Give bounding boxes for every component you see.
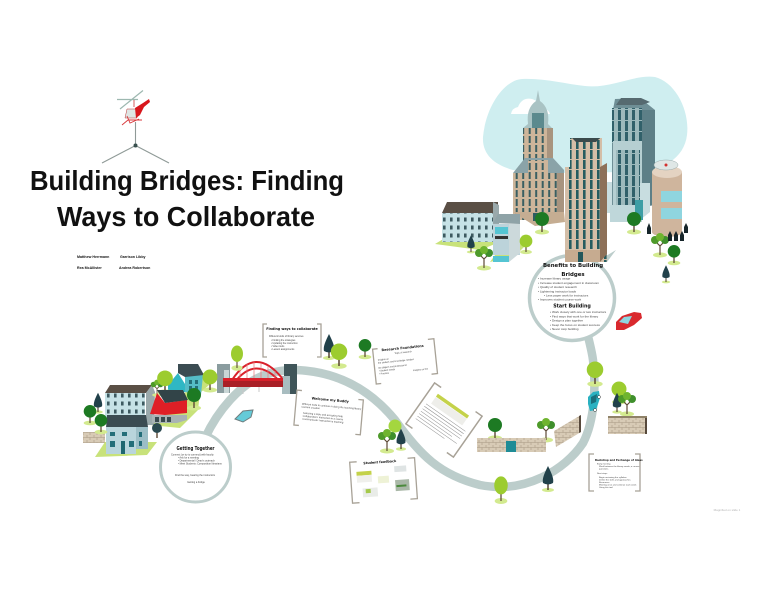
panel: getting together circle: Getting Together [176, 446, 215, 452]
panel: benefits text: • Find ways that work for the library [550, 314, 599, 318]
panel: getting together circle: Connect (or try to connect) with faculty [171, 454, 214, 456]
card: research foundations: Be diligent and professional [378, 364, 407, 370]
building: centre tower [565, 138, 616, 262]
city sky blob [483, 77, 687, 173]
card: research foundations: the student and knowledge needed [378, 358, 415, 365]
icon: red car [616, 312, 642, 330]
building: left domed tower [513, 90, 565, 226]
card: backdrop and exchange of ideas: Begin reviewing the syllabus [599, 476, 628, 479]
panel: benefits text: • Improves student course work [538, 298, 582, 302]
card: finding ways to collaborate [263, 324, 321, 357]
panel: getting together circle: • Meet Students: Composition librarians [178, 462, 223, 466]
card: welcome my buddy: Different tools to continue in doing the teaching library [302, 403, 362, 411]
card: research foundations: • Student needs [379, 368, 396, 373]
building: left long house [435, 202, 505, 250]
panel: benefits text: • Lightening instructor loads [538, 289, 577, 293]
panel: getting together circle: Find the way, bearing the instructors [175, 474, 216, 477]
icon: helicopter on pole [102, 90, 169, 163]
cloud [511, 99, 550, 114]
card: research foundations: • Practice [379, 372, 390, 376]
road trees and walls [477, 361, 647, 504]
card: finding ways to collaborate: Finding ways to collaborate [266, 327, 319, 331]
card: student feedback: Student feedback [363, 459, 397, 465]
card: research foundations: Topic of research [394, 350, 413, 355]
card: welcome my buddy: Communicate: Instruction is teaching [302, 418, 344, 424]
card: research foundations: Research Foundations [381, 344, 424, 352]
card: finding ways to collaborate: • Video tools [271, 345, 285, 348]
panel: getting together circle: Getting a bridge [187, 481, 206, 484]
card: backdrop and exchange of ideas: Work between the library needs, a course [599, 465, 640, 468]
title: Ways to Collaborate [57, 201, 315, 232]
building: teal right tower [607, 98, 655, 222]
city trees [467, 212, 688, 283]
trees near road centre [323, 334, 406, 454]
card: finding ways to collaborate: • Finding the strategies [271, 339, 296, 342]
card: welcome my buddy: Selecting a topic and accepting help [303, 412, 344, 418]
card: research foundations [372, 339, 438, 384]
panel: benefits text: • Never stop building [550, 327, 579, 331]
panel: benefits text: • Work closely with one or two instructors [550, 310, 607, 314]
building: small blue house [490, 214, 528, 262]
authors: Matthew Herrmann [77, 255, 109, 259]
panel: benefits text: Start Building [553, 304, 591, 310]
authors [77, 255, 150, 270]
panel: benefits text: • Increase student engagement in classroom [538, 281, 600, 285]
card: welcome my buddy: Welcome my Buddy [311, 396, 350, 404]
road [205, 336, 594, 487]
panel: getting together circle: • Departmental / Dean's outreach [178, 460, 215, 462]
card: backdrop and exchange of ideas [589, 454, 643, 491]
card: backdrop and exchange of ideas: Resources [599, 481, 610, 484]
card: welcome my buddy: Content creation [301, 406, 321, 410]
title [30, 165, 344, 232]
panel: benefits text: • Less paper work for instructors [544, 294, 589, 298]
footer note: Magnified on slide 1 [714, 508, 741, 512]
card: finding ways to collaborate: Different kinds of library services [269, 335, 304, 338]
card: backdrop and exchange of ideas: Meeting once and continue each week [599, 484, 637, 486]
card: backdrop and exchange of ideas: Using this tool [599, 486, 613, 489]
card: research foundations: Insights on [378, 358, 390, 362]
panel: benefits text: Bridges [561, 272, 585, 278]
card: backdrop and exchange of ideas: Backdrop and Exchange of Ideas [595, 458, 643, 462]
title: Building Bridges: Finding [30, 165, 344, 196]
building: cylinder with helipad [652, 160, 682, 237]
card: backdrop and exchange of ideas: Define the skills and approaches [599, 478, 632, 482]
card: backdrop and exchange of ideas: Early meeting [597, 462, 611, 466]
card: research foundations: Insights on the [413, 367, 429, 372]
card: welcome my buddy [294, 390, 364, 435]
card: finding ways to collaborate: • Lesson assignments [271, 348, 295, 351]
card: document page [406, 383, 482, 457]
panel: getting together circle: • Ask for a meeting [178, 456, 199, 460]
panel: benefits text [538, 263, 607, 331]
card: backdrop and exchange of ideas: Next steps [597, 472, 608, 475]
card: welcome my buddy: Collaboration: Instruction in a course [303, 415, 344, 421]
authors: Rea McAllister [77, 266, 102, 270]
panel: benefits text: • Keep the focus on student success [550, 323, 600, 327]
card: finding ways to collaborate: • Updating the instruction [271, 342, 298, 345]
panel: getting together circle [160, 432, 230, 502]
authors: Garrison Libby [120, 255, 146, 259]
card: student feedback [350, 458, 417, 503]
bridge [217, 362, 297, 394]
panel: benefits text: • Quality of student research [538, 285, 577, 289]
card: backdrop and exchange of ideas: questions [599, 468, 609, 470]
village houses [83, 345, 243, 457]
icon: boat under bridge [235, 410, 253, 422]
icon: teal car [588, 391, 600, 412]
panel: benefits text: • Increase library usage [538, 276, 571, 280]
authors: Andrea Robertson [119, 266, 150, 270]
benefits circle ring [530, 256, 614, 340]
panel: benefits text: • Design a plan together [550, 319, 583, 323]
panel: benefits text: Benefits to Building [543, 263, 603, 269]
